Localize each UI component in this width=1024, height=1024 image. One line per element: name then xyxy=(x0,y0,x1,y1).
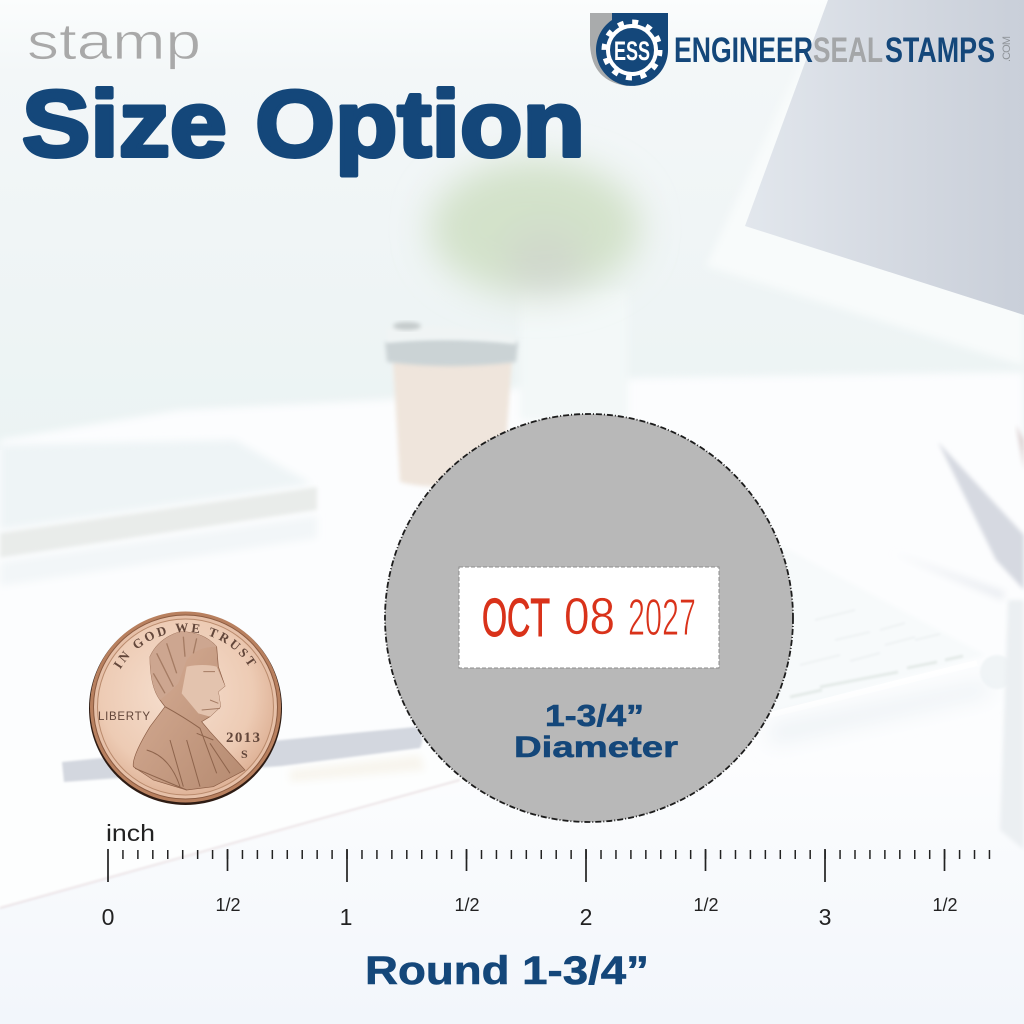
date text xyxy=(482,588,696,648)
monitor frame xyxy=(706,0,1024,366)
size caption: Round 1-3/4” xyxy=(365,949,649,993)
ruler numbers: 1/2 xyxy=(693,895,719,915)
date text: OCT xyxy=(482,588,550,648)
date text: 2027 xyxy=(628,589,696,647)
ruler numbers: 1/2 xyxy=(454,895,480,915)
ruler numbers: 3 xyxy=(819,904,831,930)
lower desk tone xyxy=(0,760,1024,1024)
keyboard xyxy=(770,545,1014,745)
penny inscriptions xyxy=(98,623,260,761)
paper sheet xyxy=(0,750,470,908)
logo: Engineer Seal Stamps: .COM xyxy=(1001,36,1013,62)
ruler unit label: inch xyxy=(106,820,155,846)
title: Size Option: Size Option xyxy=(22,71,585,176)
pencils xyxy=(893,425,1024,600)
logo: Engineer Seal Stamps xyxy=(590,13,1013,86)
plant pot xyxy=(520,290,628,420)
penny inscriptions: IN GOD WE TRUST xyxy=(113,623,256,670)
penny for scale xyxy=(89,612,282,805)
penny inscriptions: S xyxy=(241,747,248,761)
pen xyxy=(62,727,422,782)
paper edge xyxy=(0,780,460,908)
ruler numbers xyxy=(102,895,958,930)
stamp size circle xyxy=(385,414,793,822)
diameter label xyxy=(514,698,678,764)
diameter label: Diameter xyxy=(514,731,678,764)
logo wordmark: ENGINEER xyxy=(674,31,813,70)
logo emblem xyxy=(590,13,668,86)
ruler numbers: 1 xyxy=(340,904,352,930)
ruler numbers: 1/2 xyxy=(932,895,958,915)
pencil holder xyxy=(1000,600,1024,850)
penny portrait xyxy=(133,632,245,790)
ruler xyxy=(102,820,989,930)
stamp impression xyxy=(459,567,719,668)
pen shadow xyxy=(290,755,425,782)
coffee cup xyxy=(385,322,518,486)
monitor screen xyxy=(745,0,1024,315)
desk surface xyxy=(0,372,1024,760)
ruler numbers: 1/2 xyxy=(215,895,241,915)
ruler numbers: 0 xyxy=(102,904,114,930)
penny inscriptions: 2013 xyxy=(226,730,260,746)
penny inscriptions: LIBERTY xyxy=(98,711,150,723)
date text: 08 xyxy=(564,588,615,646)
subtitle: stamp: stamp xyxy=(27,13,201,70)
diameter label: 1-3/4” xyxy=(545,698,644,733)
logo emblem: ESS xyxy=(614,36,650,66)
logo: Engineer Seal Stamps: SEAL xyxy=(813,31,883,70)
notebook xyxy=(0,440,317,586)
ruler ticks xyxy=(108,849,989,882)
plant foliage xyxy=(430,160,640,296)
ruler numbers: 2 xyxy=(580,904,592,930)
logo: Engineer Seal Stamps: STAMPS xyxy=(885,31,995,70)
